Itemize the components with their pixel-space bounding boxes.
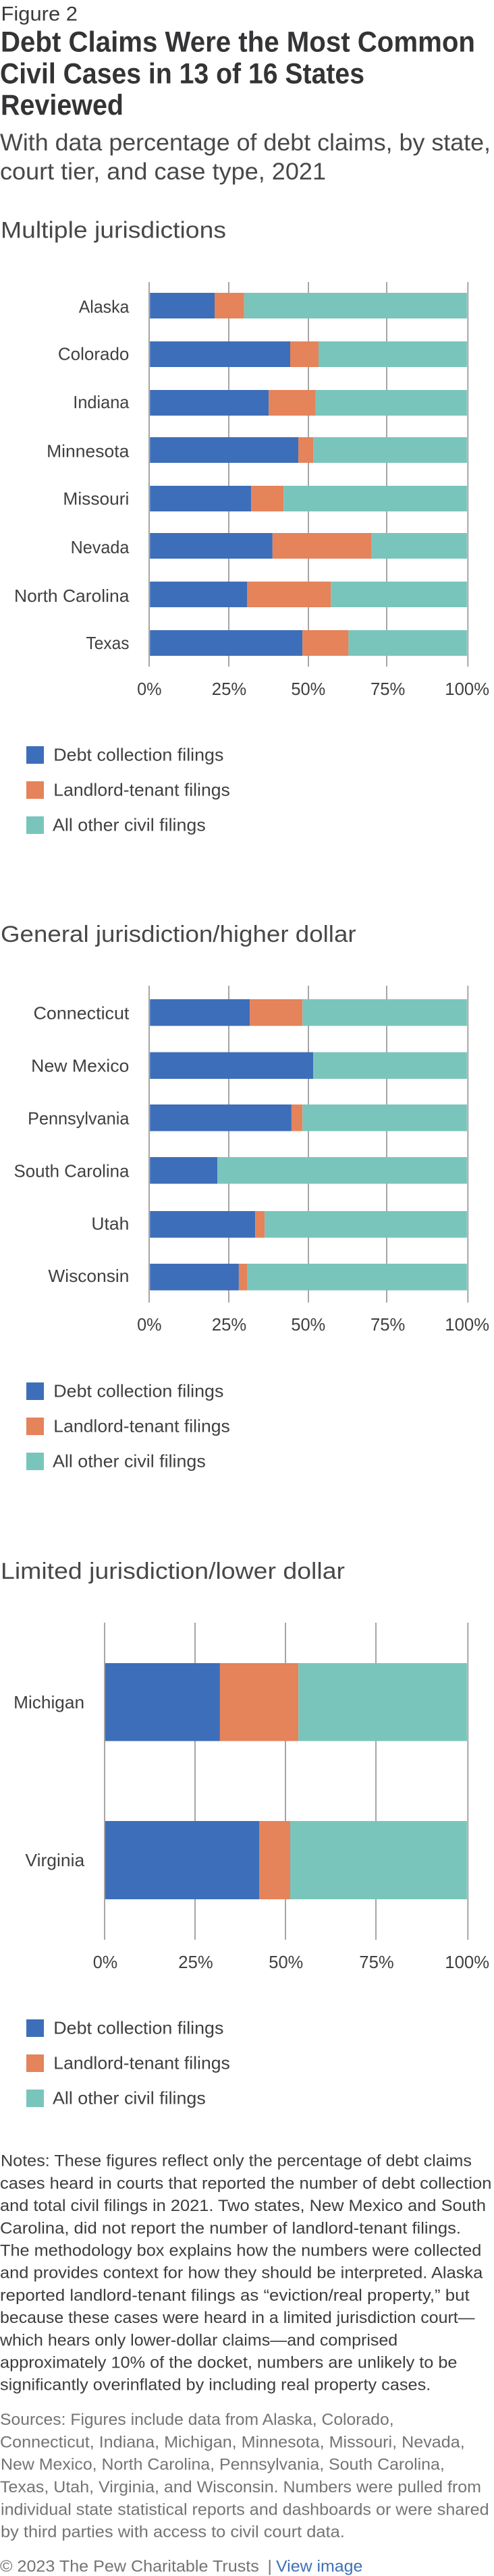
x axis labels — [93, 1952, 489, 1972]
notes text block: cases heard in courts that reported the number of debt collection — [0, 2175, 491, 2193]
x axis labels: 75% — [370, 679, 405, 699]
row: Utah: Utah — [91, 1213, 129, 1233]
section heading: limited jurisdiction: Limited jurisdiction/lower dollar — [1, 1559, 345, 1584]
row: Indiana: Indiana — [73, 392, 130, 412]
legend: multiple jurisdictions — [26, 744, 230, 835]
title — [0, 26, 475, 121]
row: Wisconsin — [48, 1264, 467, 1290]
x axis labels: 50% — [291, 679, 325, 699]
sources text block: Texas, Utah, Virginia, and Wisconsin. Numbers were pulled from — [0, 2478, 481, 2496]
row: Minnesota: Minnesota — [47, 441, 130, 461]
legend: limited jurisdiction — [26, 2018, 230, 2108]
row: South Carolina: South Carolina — [13, 1160, 130, 1181]
row: New Mexico — [31, 1053, 467, 1079]
x axis labels: 0% — [93, 1952, 117, 1972]
legend: general jurisdiction: All other civil filings — [53, 1451, 206, 1472]
row: Virginia: Virginia — [25, 1850, 85, 1870]
row: Colorado: Colorado — [58, 344, 129, 364]
row: Alaska — [79, 293, 467, 318]
row: Nevada — [71, 533, 467, 559]
sources text block: individual state statistical reports and dashboards or were shared — [1, 2500, 489, 2519]
notes text block — [0, 2152, 491, 2395]
bar chart: limited jurisdiction — [13, 1623, 489, 1972]
notes text block: reported landlord-tenant filings as “eviction/real property,” but — [0, 2287, 470, 2305]
notes text block: Notes: These figures reflect only the percentage of debt claims — [1, 2152, 472, 2171]
legend: general jurisdiction: Debt collection filings — [53, 1381, 223, 1401]
row: Missouri: Missouri — [63, 488, 129, 509]
x axis labels: 50% — [291, 1314, 325, 1335]
legend: multiple jurisdictions: All other civil filings — [53, 814, 206, 835]
legend: multiple jurisdictions: Debt collection filings — [53, 744, 223, 764]
x axis labels — [137, 1314, 489, 1335]
copyright footer: | — [267, 2558, 272, 2576]
row: Michigan — [13, 1663, 467, 1741]
row: Michigan: Michigan — [13, 1692, 84, 1712]
title: Debt Claims Were the Most Common — [1, 26, 475, 59]
row: Alaska: Alaska — [79, 296, 130, 316]
legend: general jurisdiction — [26, 1381, 230, 1472]
x axis labels: 75% — [359, 1952, 394, 1972]
x axis labels — [137, 679, 489, 699]
sources text block — [0, 2411, 489, 2541]
notes text block: Carolina, did not report the number of landlord-tenant filings. — [0, 2219, 461, 2237]
sources text block: by third parties with access to civil court data. — [1, 2523, 345, 2541]
legend: limited jurisdiction: Landlord-tenant filings — [53, 2053, 230, 2073]
notes text block: and total civil filings in 2021. Two states, New Mexico and South — [0, 2197, 486, 2215]
x axis labels: 25% — [178, 1952, 213, 1972]
copyright footer — [0, 2558, 362, 2576]
row: Colorado — [58, 341, 467, 367]
row: Indiana — [73, 390, 467, 416]
row: Connecticut: Connecticut — [34, 1003, 130, 1024]
legend: limited jurisdiction: Debt collection filings — [53, 2018, 223, 2038]
x axis labels: 0% — [137, 679, 162, 699]
copyright footer: © 2023 The Pew Charitable Trusts — [0, 2558, 259, 2576]
notes text block: which hears only lower-dollar claims—and comprised — [0, 2331, 397, 2349]
notes text block: and provides context for how they should be interpreted. Alaska — [0, 2264, 483, 2283]
legend: limited jurisdiction: All other civil filings — [53, 2088, 206, 2108]
copyright footer: View image — [276, 2558, 362, 2576]
row: Wisconsin: Wisconsin — [48, 1266, 129, 1286]
x axis labels: 100% — [445, 1952, 489, 1972]
x axis labels: 100% — [445, 1314, 489, 1335]
bar chart: general jurisdiction — [13, 986, 489, 1335]
row: North Carolina: North Carolina — [14, 586, 130, 606]
notes text block: The methodology box explains how the numbers were collected — [0, 2241, 481, 2260]
row: Minnesota — [47, 437, 467, 463]
row: Texas — [86, 630, 467, 656]
x axis labels: 0% — [137, 1314, 162, 1335]
x axis labels: 25% — [212, 1314, 246, 1335]
section heading: general jurisdiction: General jurisdiction/higher dollar — [1, 922, 356, 947]
row: Connecticut — [34, 999, 467, 1026]
notes text block: because these cases were heard in a limited jurisdiction court— — [0, 2309, 475, 2327]
figure label: Figure 2 — [1, 3, 78, 26]
title: Reviewed — [1, 89, 124, 121]
row: Pennsylvania — [28, 1104, 467, 1131]
row: Utah — [91, 1211, 467, 1237]
sources text block: Sources: Figures include data from Alaska, Colorado, — [0, 2411, 394, 2429]
bar chart: multiple jurisdictions — [14, 282, 489, 699]
legend: general jurisdiction: Landlord-tenant filings — [53, 1416, 230, 1436]
x axis labels: 25% — [212, 679, 246, 699]
notes text block: significantly overinflated by including real property cases. — [0, 2376, 431, 2395]
row: Virginia — [25, 1821, 467, 1899]
subtitle: With data percentage of debt claims, by state, — [0, 130, 491, 156]
title: Civil Cases in 13 of 16 States — [0, 57, 364, 90]
subtitle: court tier, and case type, 2021 — [0, 159, 326, 185]
x axis labels: 50% — [269, 1952, 303, 1972]
section heading: multiple jurisdictions: Multiple jurisdictions — [1, 217, 226, 243]
legend: multiple jurisdictions: Landlord-tenant filings — [53, 779, 230, 800]
row: Nevada: Nevada — [71, 537, 130, 557]
x axis labels: 100% — [445, 679, 489, 699]
x axis labels: 75% — [370, 1314, 405, 1335]
sources text block: New Mexico, North Carolina, Pennsylvania, South Carolina, — [1, 2456, 445, 2474]
row: South Carolina — [13, 1157, 467, 1183]
subtitle — [0, 130, 491, 185]
notes text block: approximately 10% of the docket, numbers are unlikely to be — [0, 2353, 458, 2372]
row: North Carolina — [14, 582, 467, 607]
row: Texas: Texas — [86, 633, 130, 653]
sources text block: Connecticut, Indiana, Michigan, Minnesota, Missouri, Nevada, — [0, 2433, 465, 2451]
row: New Mexico: New Mexico — [31, 1056, 129, 1076]
row: Pennsylvania: Pennsylvania — [28, 1108, 130, 1128]
row: Missouri — [63, 486, 467, 511]
